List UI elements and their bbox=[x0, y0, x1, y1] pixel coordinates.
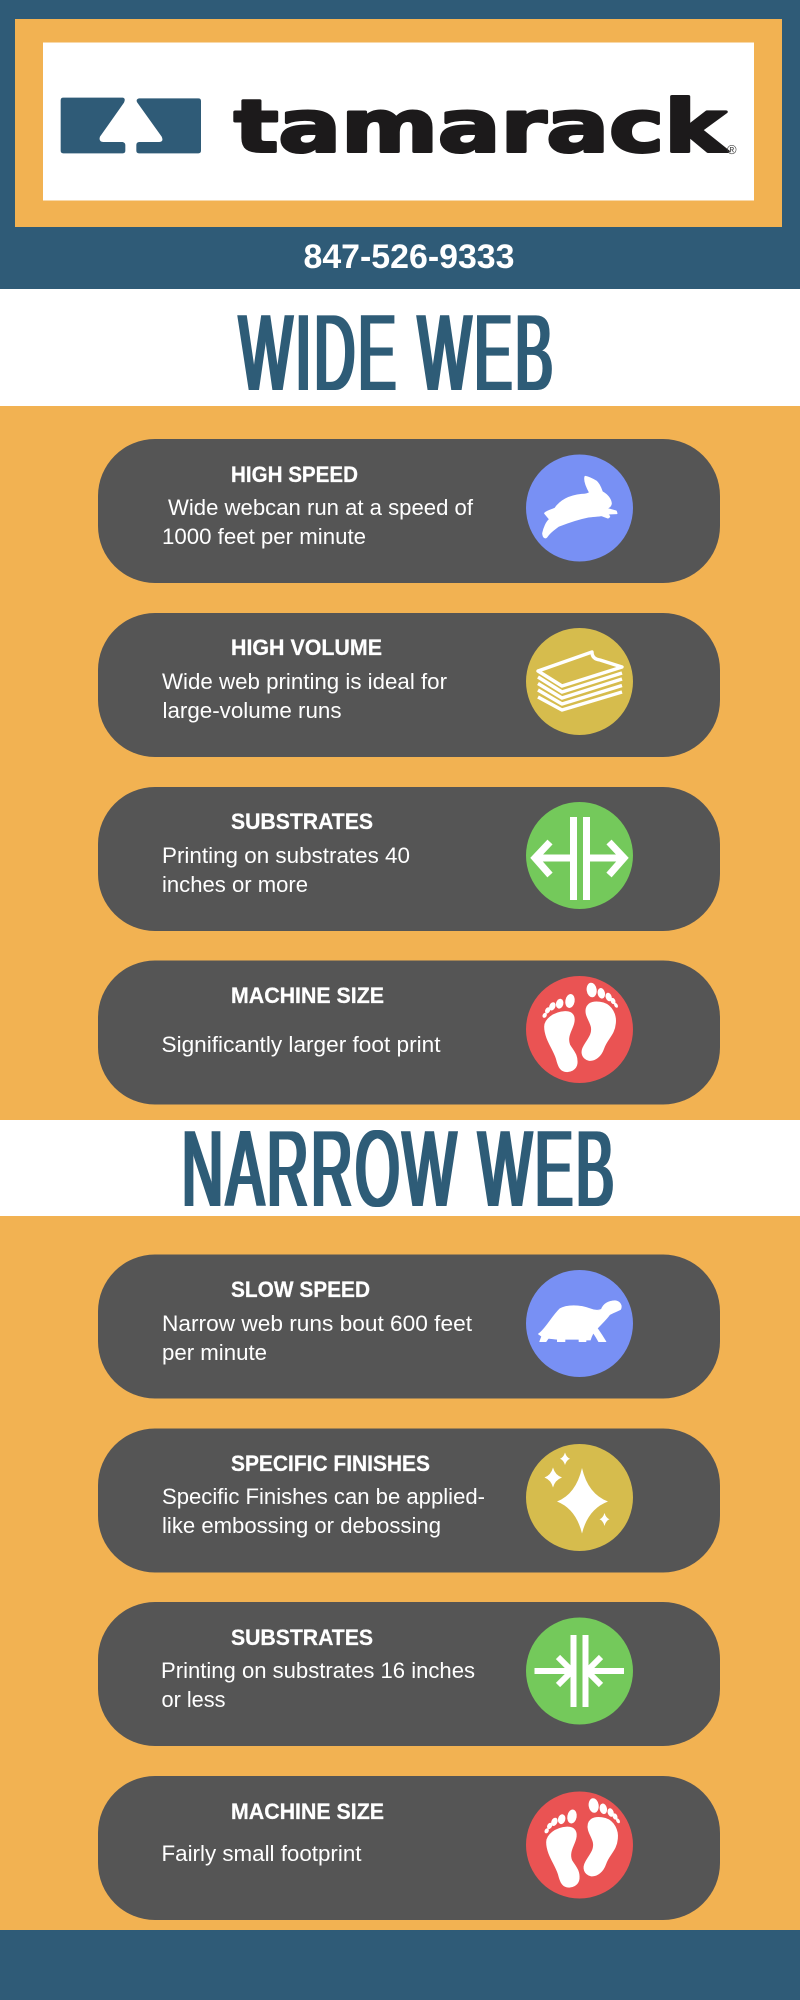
card: high volume bbox=[98, 613, 720, 757]
card: slow speed: Narrow web runs bout 600 feet bbox=[162, 1311, 472, 1336]
card: substrates narrow: SUBSTRATES bbox=[231, 1625, 373, 1650]
card: high volume: Wide web printing is ideal for bbox=[162, 669, 447, 694]
icon: paper stack bbox=[538, 652, 622, 710]
card: substrates narrow: or less bbox=[162, 1687, 226, 1712]
icon: compress arrows bbox=[534, 1635, 624, 1707]
card: machine size narrow: Fairly small footprint bbox=[162, 1841, 362, 1866]
card: specific finishes: Specific Finishes can be applied- bbox=[162, 1484, 485, 1509]
card: specific finishes bbox=[98, 1428, 720, 1572]
logo: tamarack bbox=[61, 84, 737, 168]
card: high speed: Wide webcan run at a speed of bbox=[168, 495, 474, 520]
registered mark: ® bbox=[727, 142, 737, 157]
icon: tamarack tree mark bbox=[61, 98, 201, 153]
card: high speed bbox=[98, 439, 720, 583]
card: substrates narrow bbox=[98, 1602, 720, 1746]
card: high volume: HIGH VOLUME bbox=[231, 635, 382, 660]
card: high volume: large-volume runs bbox=[162, 698, 342, 723]
card: substrates wide: SUBSTRATES bbox=[231, 809, 373, 834]
logo wordmark: tamarack bbox=[234, 84, 729, 168]
card: substrates wide: Printing on substrates 40 bbox=[162, 843, 410, 868]
footer band bbox=[0, 1930, 800, 2000]
card: substrates narrow: Printing on substrates 16 inches bbox=[161, 1658, 475, 1683]
icon: footprints bbox=[542, 982, 619, 1071]
card: machine size wide bbox=[98, 960, 720, 1104]
icon: rabbit bbox=[543, 477, 617, 538]
card: high speed: HIGH SPEED bbox=[231, 462, 358, 487]
header band bbox=[0, 0, 800, 289]
card: slow speed: per minute bbox=[162, 1340, 267, 1365]
heading band: wide web bbox=[0, 289, 800, 414]
card: machine size narrow bbox=[98, 1776, 720, 1920]
icon: footprints bbox=[544, 1798, 621, 1887]
card: machine size wide: Significantly larger foot print bbox=[162, 1032, 440, 1057]
panel: narrow web bbox=[0, 1216, 800, 1930]
card: substrates wide: inches or more bbox=[162, 872, 308, 897]
phone number: 847-526-9333 bbox=[304, 238, 514, 276]
card: machine size wide: MACHINE SIZE bbox=[231, 983, 384, 1008]
card: specific finishes: like embossing or debossing bbox=[162, 1513, 441, 1538]
card: slow speed: SLOW SPEED bbox=[231, 1277, 370, 1302]
card: substrates wide bbox=[98, 787, 720, 931]
icon: sparkles bbox=[544, 1452, 610, 1534]
card: machine size narrow: MACHINE SIZE bbox=[231, 1799, 384, 1824]
card: high speed: 1000 feet per minute bbox=[162, 524, 366, 549]
card: specific finishes: SPECIFIC FINISHES bbox=[231, 1451, 430, 1476]
card: slow speed bbox=[98, 1254, 720, 1398]
icon: turtle bbox=[538, 1301, 621, 1342]
icon: expand arrows bbox=[535, 817, 624, 900]
panel: wide web bbox=[0, 406, 800, 1120]
